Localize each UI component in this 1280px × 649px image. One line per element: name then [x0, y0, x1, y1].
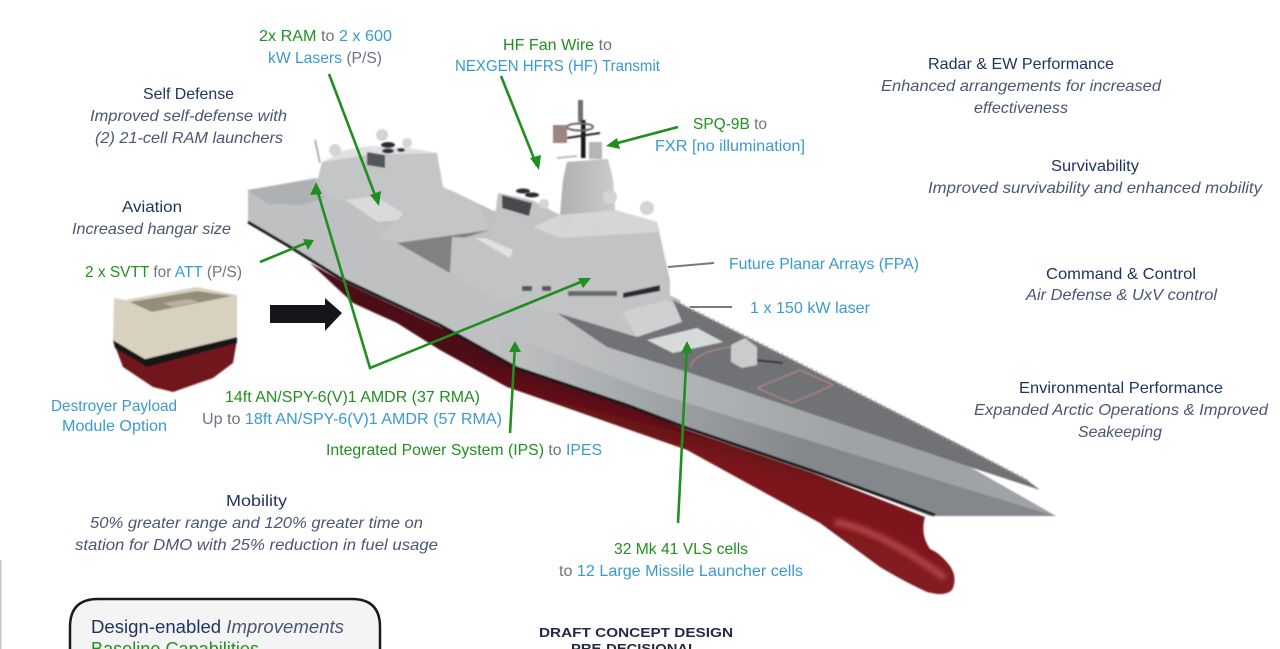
text: survivability: Improved survivability and enhanced mobility	[928, 180, 1263, 197]
arrow: black transition arrow	[270, 298, 342, 331]
callout: RAM to lasers: 2x RAM to 2 x 600	[259, 28, 392, 45]
callout: AMDR radar: 14ft AN/SPY-6(V)1 AMDR (37 RMA)	[225, 389, 480, 406]
green callout arrows	[260, 74, 693, 523]
callout: HF fan wire: HF Fan Wire to	[503, 37, 612, 54]
text: aviation: Increased hangar size	[72, 221, 231, 238]
callout: AMDR radar: Up to 18ft AN/SPY-6(V)1 AMDR (57 RMA)	[202, 411, 502, 428]
callout: RAM to lasers	[259, 28, 392, 67]
ship: forward lower hull band	[500, 334, 1056, 516]
callout: VLS cells: 32 Mk 41 VLS cells	[614, 541, 748, 558]
ship: stern deck	[247, 179, 325, 205]
ship: bulb highlight	[835, 522, 945, 578]
callout: HF fan wire	[455, 37, 661, 75]
text: self defense: (2) 21-cell RAM launchers	[95, 130, 283, 147]
ship: mast tower shading	[560, 159, 615, 216]
callout: integrated power system: Integrated Power System (IPS) to IPES	[326, 442, 602, 459]
text: radar and EW performance: Radar & EW Performance	[928, 56, 1114, 73]
text: mobility	[75, 493, 438, 554]
text: radar and EW performance: Enhanced arrangements for increased	[881, 78, 1162, 95]
ship: main hull side	[248, 178, 1056, 516]
text: mobility: Mobility	[226, 493, 287, 510]
ship: domes and sensors	[315, 129, 654, 234]
text: command and control: Air Defense & UxV control	[1025, 287, 1217, 304]
callout: 150 kW laser: 1 x 150 kW laser	[750, 300, 871, 317]
ship: helipad markings	[690, 347, 833, 403]
text: environmental performance	[974, 380, 1269, 441]
text: self defense: Self Defense	[143, 86, 234, 103]
leader lines: grey	[668, 263, 732, 307]
callout: VLS cells	[559, 541, 803, 580]
callout: AMDR radar	[202, 389, 502, 428]
text: mobility: station for DMO with 25% reduction in fuel usage	[75, 537, 438, 554]
ship: mast	[553, 100, 602, 159]
text: aviation	[72, 199, 231, 238]
callout: VLS cells: to 12 Large Missile Launcher cells	[559, 563, 803, 580]
text: environmental performance: Expanded Arctic Operations & Improved	[974, 402, 1269, 419]
callout: SPQ-9B to FXR	[655, 116, 805, 155]
text: draft concept design notice	[539, 625, 733, 649]
callout: destroyer payload module option: Module Option	[62, 418, 167, 435]
ship: forward upper hull band	[500, 300, 1056, 516]
ship: midship deck	[397, 230, 490, 273]
text: self defense	[90, 86, 287, 147]
text: environmental performance: Environmental Performance	[1019, 380, 1223, 397]
callout: RAM to lasers: kW Lasers (P/S)	[268, 50, 382, 67]
text: aviation: Aviation	[122, 199, 182, 216]
ship: radar windows and openings	[367, 142, 660, 298]
ship: forward lower block	[450, 159, 682, 337]
text: radar and EW performance: effectiveness	[974, 100, 1068, 117]
ship: red lower hull and bulbous bow	[310, 263, 955, 594]
text: radar and EW performance	[881, 56, 1162, 117]
callout: HF fan wire: NEXGEN HFRS (HF) Transmit	[455, 58, 661, 75]
text: command and control: Command & Control	[1046, 266, 1196, 283]
module: destroyer payload module	[113, 287, 237, 392]
ship: black waterline	[248, 222, 935, 515]
callout: destroyer payload module option: Destroyer Payload	[51, 398, 177, 415]
ship: deck railing	[673, 300, 1027, 480]
callout: SPQ-9B to FXR: FXR [no illumination]	[655, 138, 805, 155]
callout: destroyer payload module option	[51, 398, 177, 435]
callout: SVTT to ATT: 2 x SVTT for ATT (P/S)	[85, 264, 242, 281]
callout: SPQ-9B to FXR: SPQ-9B to	[693, 116, 767, 133]
text: draft concept design notice: DRAFT CONCEPT DESIGN	[539, 625, 733, 640]
text: survivability	[928, 158, 1263, 197]
ship: main gun	[731, 338, 783, 368]
text: command and control	[1025, 266, 1217, 304]
text: environmental performance: Seakeeping	[1078, 424, 1162, 441]
legend box: Design-enabled Improvements	[91, 617, 344, 637]
text: self defense: Improved self-defense with	[90, 108, 287, 125]
ship: aft superstructure	[318, 153, 490, 243]
illustration: destroyer ship	[247, 100, 1056, 594]
text: survivability: Survivability	[1051, 158, 1139, 175]
ship: forward deck	[557, 300, 1040, 490]
ship: bridge wing	[622, 300, 682, 337]
ship: upper deck light band	[533, 210, 658, 238]
ship: low block top	[475, 238, 513, 258]
ship: VLS cells	[647, 328, 723, 353]
ship: aft tower top face	[322, 146, 437, 162]
legend box	[68, 598, 382, 649]
text: mobility: 50% greater range and 120% greater time on	[90, 515, 423, 532]
callout: future planar arrays: Future Planar Arrays (FPA)	[729, 256, 919, 273]
ship: aft laser platform	[345, 196, 403, 222]
